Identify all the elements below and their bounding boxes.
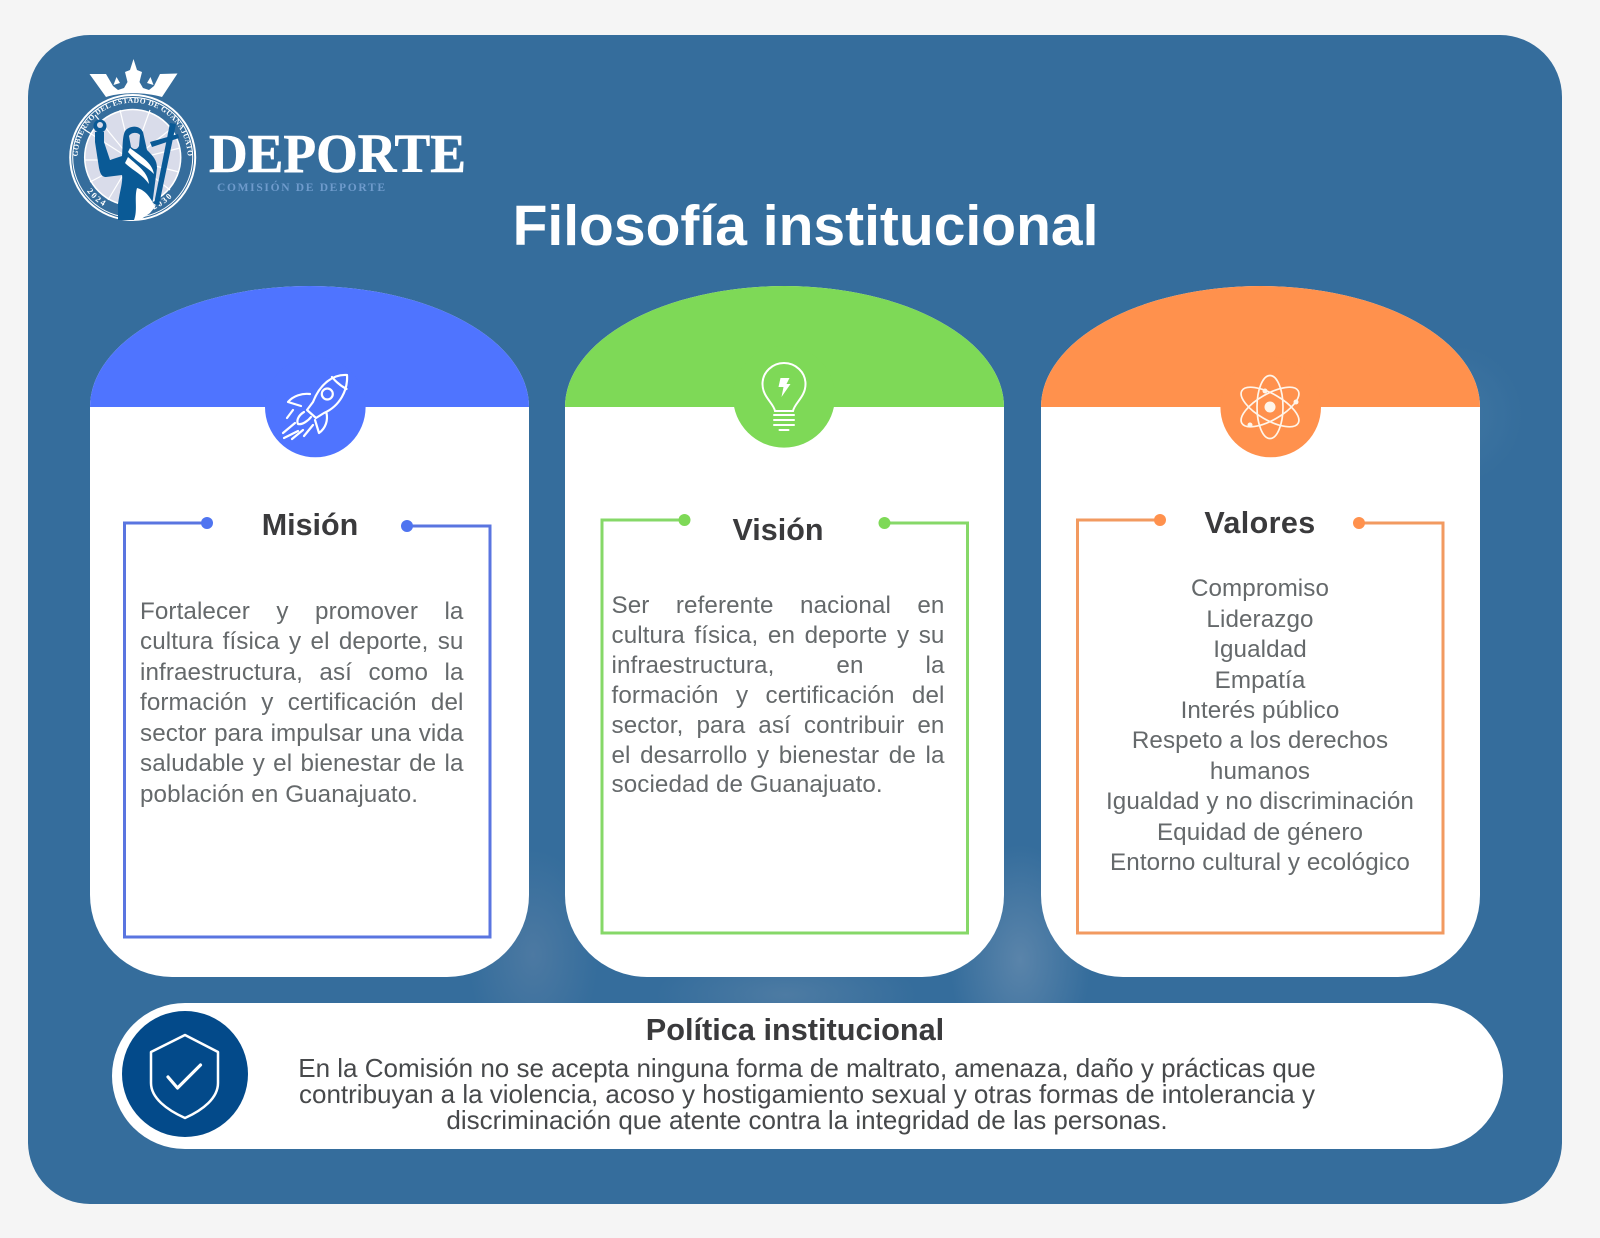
- seal: 2030: [153, 194, 172, 210]
- text: visión: [612, 592, 944, 798]
- text: visión: infraestructura, en la: [612, 652, 944, 679]
- logo: Comisión de Deporte: [69, 59, 466, 221]
- text: visión: sociedad de Guanajuato.: [612, 771, 883, 798]
- text: misión: Fortalecer y promover la: [140, 598, 464, 625]
- text: política: discriminación que atente contra la integridad de las personas.: [446, 1105, 1168, 1135]
- heading: Política institucional: Política institucional: [646, 1012, 944, 1047]
- icon: rocket: [265, 374, 366, 458]
- text: política: [298, 1053, 1316, 1135]
- header band: green: [564, 286, 1004, 407]
- text: misión: cultura física y el deporte, su: [140, 628, 464, 655]
- crown: [90, 59, 178, 97]
- text: valores list: Entorno cultural y ecológico: [1110, 849, 1410, 876]
- icon: light bulb: [734, 362, 834, 448]
- text: valores list: Empatía: [1215, 667, 1305, 694]
- panel: Política institucional: [112, 1003, 1503, 1149]
- text: valores list: Liderazgo: [1206, 606, 1314, 633]
- text: visión: cultura física, en deporte y su: [612, 622, 944, 649]
- text: misión: [140, 598, 464, 808]
- icon: atom: [1220, 374, 1321, 458]
- header band: orange: [1041, 286, 1480, 407]
- panel: Visión: [564, 286, 1004, 977]
- frame and connector dots: [123, 517, 492, 938]
- text: visión: sector, para así contribuir en: [612, 712, 944, 739]
- text: política: contribuyan a la violencia, acoso y hostigamiento sexual y otras formas de intolerancia y: [299, 1079, 1315, 1109]
- seal: 2024: [87, 188, 106, 206]
- text: misión: sector para impulsar una vida: [140, 720, 464, 747]
- text: visión: formación y certificación del: [612, 682, 944, 709]
- title: Filosofía institucional: [513, 194, 1098, 258]
- text: misión: población en Guanajuato.: [140, 781, 418, 808]
- frame and connector dots: [600, 514, 969, 934]
- text: valores list: Respeto a los derechos: [1132, 727, 1388, 754]
- text: misión: infraestructura, así como la: [140, 659, 464, 686]
- text: visión: el desarrollo y bienestar de la: [612, 742, 944, 769]
- panel: Misión: [90, 286, 529, 977]
- wordmark DEPORTE: DEPORTE: [209, 123, 466, 184]
- heading: Valores: Valores: [1204, 506, 1316, 540]
- panel: Valores: [1041, 286, 1480, 977]
- heading: Visión: Visión: [733, 513, 823, 547]
- text: valores list: Interés público: [1181, 697, 1339, 724]
- text: valores list: humanos: [1210, 758, 1310, 785]
- wordmark subtitle: COMISIÓN DE DEPORTE: [217, 180, 385, 194]
- header band: blue: [90, 286, 529, 407]
- seal: [69, 94, 196, 221]
- text: visión: Ser referente nacional en: [612, 592, 944, 619]
- text: misión: saludable y el bienestar de la: [140, 750, 464, 777]
- frame and connector dots: [1076, 514, 1444, 934]
- text: valores list: Equidad de género: [1157, 819, 1363, 846]
- text: valores list: Compromiso: [1191, 575, 1329, 602]
- text: política: En la Comisión no se acepta ninguna forma de maltrato, amenaza, daño y prácticas que: [298, 1053, 1316, 1083]
- seal: GOBIERNO DEL ESTADO DE GUANAJUATO: [73, 98, 192, 156]
- heading: Misión: Misión: [262, 508, 358, 542]
- text: valores list: [1106, 575, 1414, 876]
- icon: shield with check: [122, 1011, 248, 1137]
- text: valores list: Igualdad: [1213, 636, 1307, 663]
- text: valores list: Igualdad y no discriminación: [1106, 788, 1414, 815]
- text: misión: formación y certificación del: [140, 689, 464, 716]
